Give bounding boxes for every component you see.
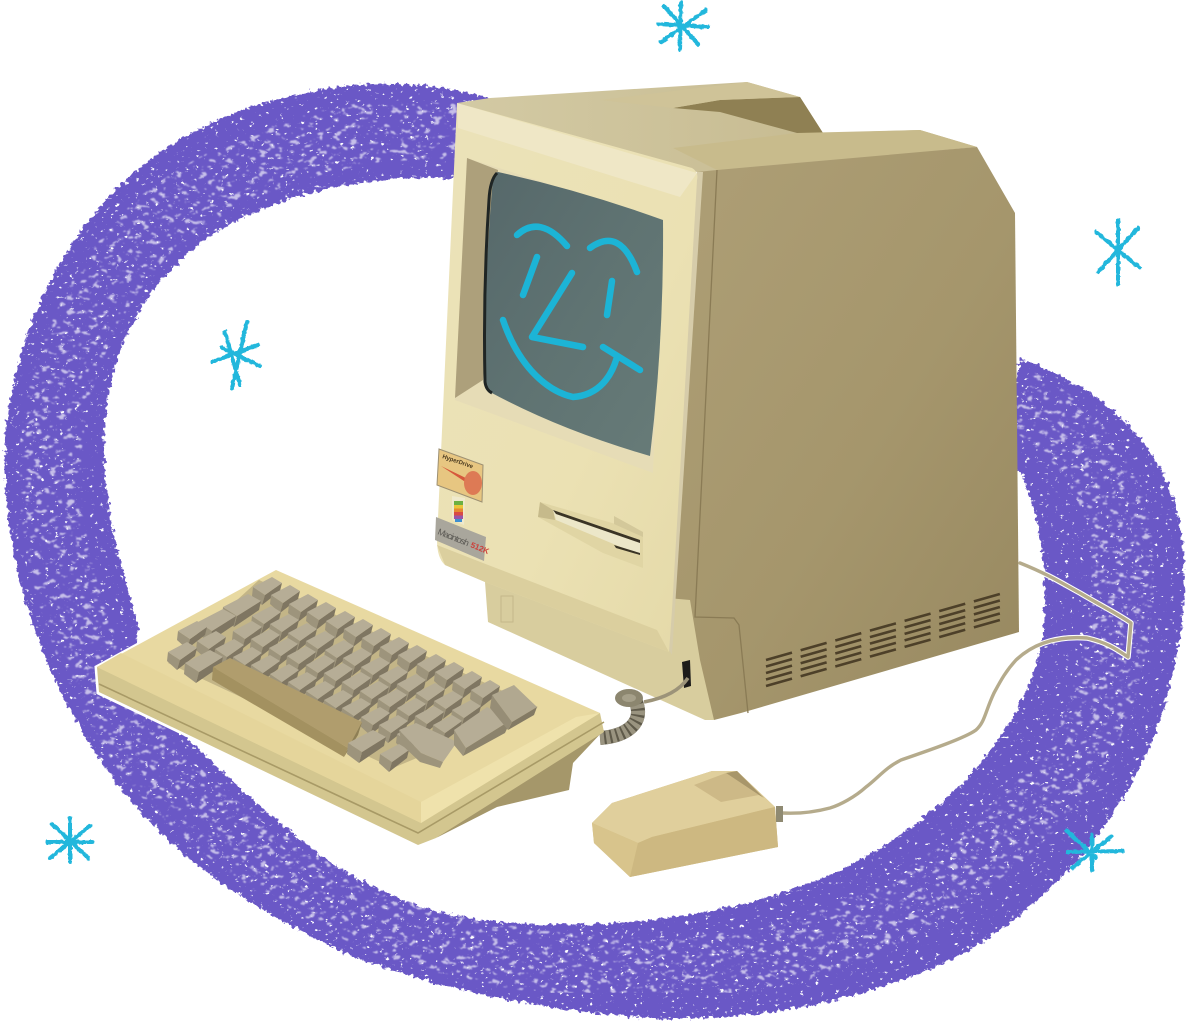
side vents bbox=[766, 592, 1007, 686]
space bar bbox=[212, 658, 362, 757]
mouse button bbox=[694, 773, 759, 802]
macintosh 512K badge: Macintosh bbox=[436, 527, 471, 548]
front face bbox=[435, 103, 697, 652]
floppy drive slot bbox=[538, 502, 643, 568]
star right bbox=[1096, 220, 1140, 284]
rainbow apple sticker bbox=[452, 496, 465, 525]
screen surround bbox=[455, 158, 663, 473]
computer: Macintosh 512K bbox=[435, 82, 1019, 720]
star top bbox=[658, 2, 708, 50]
computer top and handle bbox=[457, 82, 977, 172]
macintosh 512K badge: 512K bbox=[469, 541, 491, 556]
star bottom left bbox=[47, 818, 92, 862]
power cord and mouse cable bbox=[782, 563, 1131, 813]
hyperdrive badge: HyperDrive bbox=[441, 454, 474, 471]
keyboard base bbox=[97, 667, 604, 845]
keyboard top bbox=[97, 570, 600, 823]
hyperdrive badge bbox=[437, 449, 483, 502]
base under the front bbox=[485, 582, 714, 720]
keyboard outline bbox=[96, 569, 418, 846]
star left bbox=[212, 322, 260, 388]
keys bbox=[167, 577, 537, 772]
front bevel bbox=[657, 172, 703, 655]
port and keyboard cable bbox=[644, 660, 691, 702]
star bottom right bbox=[1066, 830, 1122, 870]
large bottom keys bbox=[347, 685, 537, 772]
keyboard bbox=[96, 569, 604, 846]
screen bbox=[484, 172, 663, 456]
mouse bbox=[592, 771, 783, 877]
computer side panel bbox=[660, 147, 1019, 720]
keyboard cable coil bbox=[600, 689, 643, 738]
smiley face bbox=[503, 227, 640, 397]
macintosh 512K badge bbox=[435, 517, 491, 561]
keyboard wedge foot bbox=[418, 730, 604, 843]
